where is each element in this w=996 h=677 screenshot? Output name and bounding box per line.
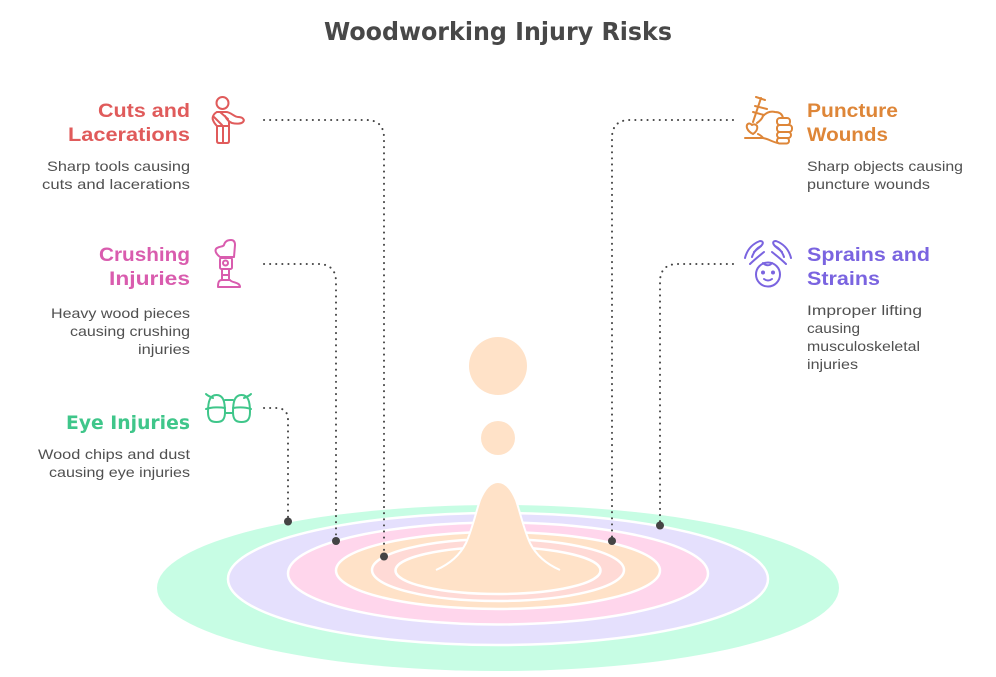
heading: Strains	[807, 269, 880, 290]
description	[42, 158, 190, 192]
panel: cuts and lacerations	[42, 97, 244, 192]
icon: hands over face	[745, 241, 791, 286]
description	[38, 446, 190, 480]
title: Woodworking Injury Risks	[324, 17, 672, 46]
heading: Injuries	[109, 269, 190, 290]
ring: orange	[336, 532, 660, 609]
description: causing eye injuries	[49, 464, 190, 480]
description: Heavy wood pieces	[51, 305, 190, 321]
description: Sharp objects causing	[807, 158, 963, 174]
ring: inner pink	[372, 539, 624, 601]
connector: eye injuries	[264, 408, 292, 526]
ring: outer green	[157, 505, 839, 671]
large droplet	[469, 337, 527, 395]
heading: Wounds	[807, 125, 888, 146]
ring: purple	[228, 513, 768, 645]
icon: hand with syringe	[745, 97, 792, 144]
description	[51, 305, 190, 357]
chart: ripple rings and water drop	[157, 337, 839, 671]
icon: prosthetic leg	[216, 240, 240, 287]
ring: centre	[396, 547, 600, 594]
icon: safety goggles	[206, 394, 251, 422]
panel: crushing injuries	[51, 240, 240, 357]
description: causing	[807, 320, 860, 336]
water peak	[436, 482, 560, 570]
description: puncture wounds	[807, 176, 930, 192]
heading	[807, 101, 898, 146]
description	[807, 158, 963, 192]
heading: Crushing	[99, 245, 190, 266]
icon: injured person	[213, 97, 244, 143]
heading: Cuts and	[98, 101, 190, 122]
panel: eye injuries	[38, 394, 251, 480]
ring: pink	[288, 522, 708, 624]
heading	[68, 101, 190, 146]
heading: Lacerations	[68, 125, 190, 146]
description: musculoskeletal	[807, 338, 920, 354]
heading	[807, 245, 930, 290]
heading: Sprains and	[807, 245, 930, 266]
panel: puncture wounds	[745, 97, 963, 192]
connector: cuts and lacerations	[264, 120, 388, 560]
description: cuts and lacerations	[42, 176, 190, 192]
small droplet	[481, 421, 515, 455]
connector: crushing injuries	[264, 264, 340, 545]
description: injuries	[807, 356, 858, 372]
heading: Puncture	[807, 101, 898, 122]
connector: puncture wounds	[608, 120, 733, 545]
description: causing crushing	[70, 323, 190, 339]
description: Wood chips and dust	[38, 446, 190, 462]
description	[807, 302, 922, 372]
description: Sharp tools causing	[47, 158, 190, 174]
heading	[99, 245, 190, 290]
heading: Eye Injuries	[66, 412, 190, 434]
description: Improper lifting	[807, 302, 922, 318]
description: injuries	[138, 341, 190, 357]
connector: sprains and strains	[656, 264, 733, 530]
panel: sprains and strains	[745, 241, 930, 372]
